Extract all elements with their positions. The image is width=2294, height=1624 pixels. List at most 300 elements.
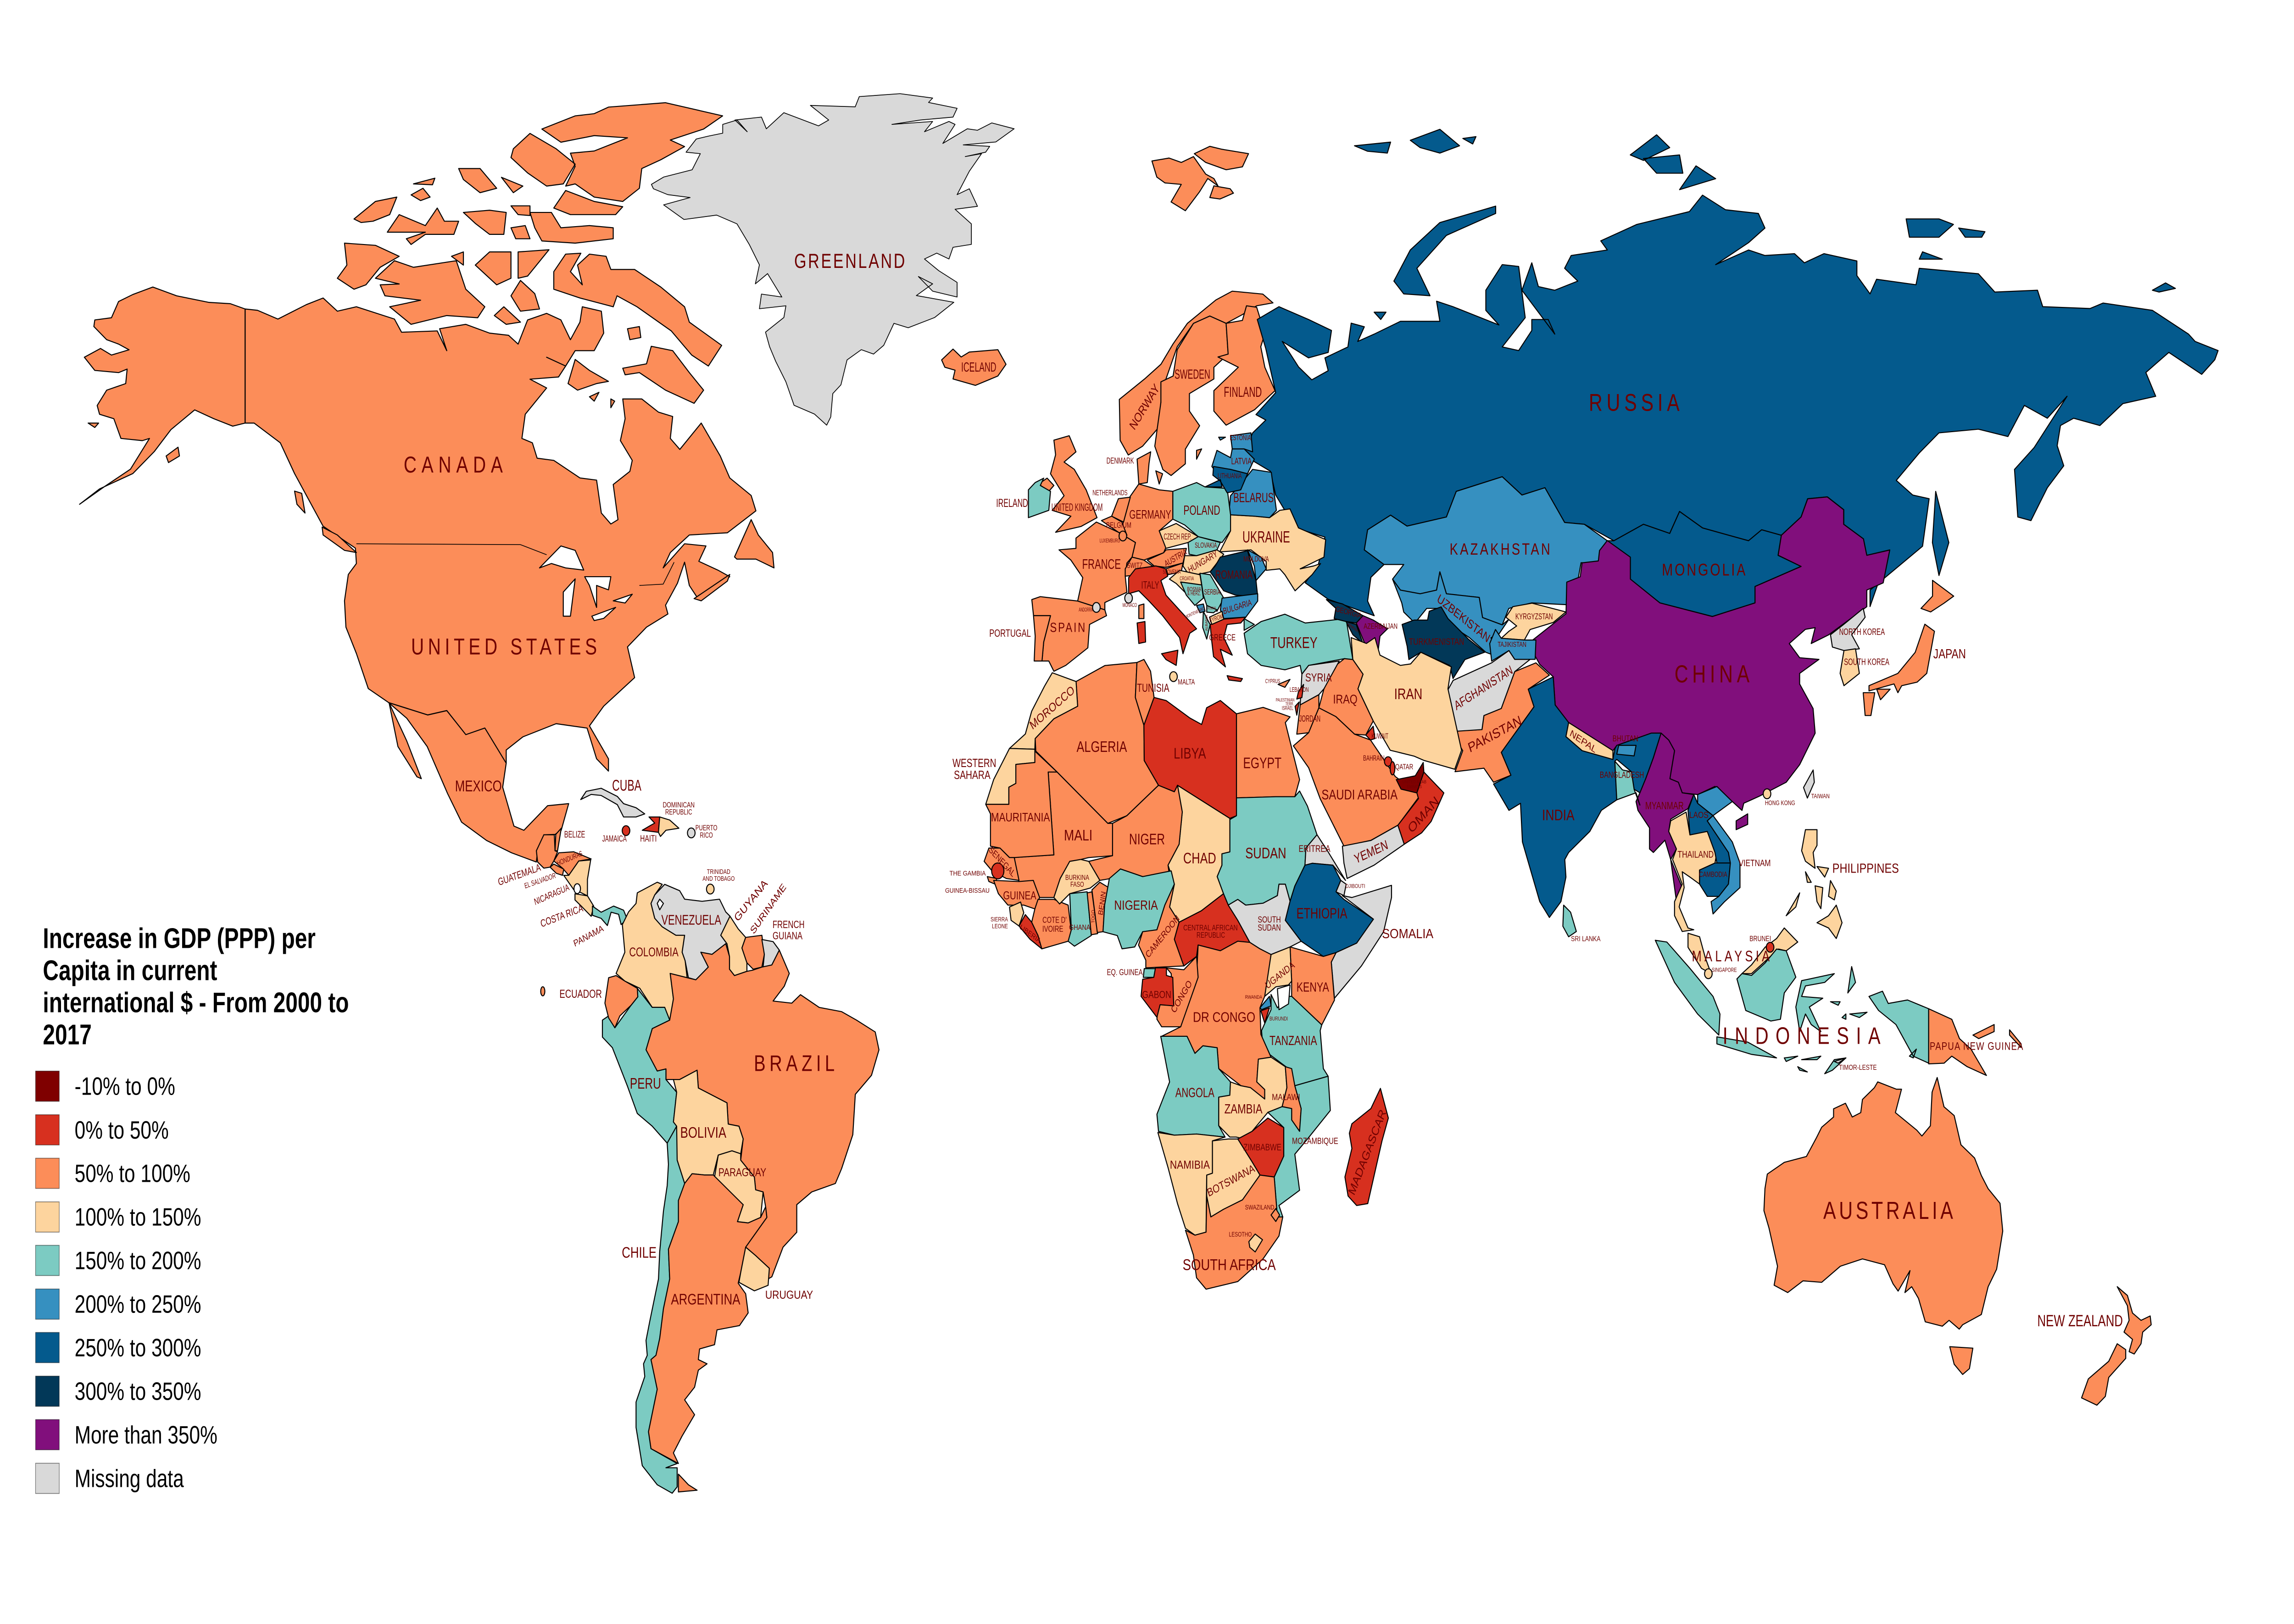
Belgium: [1102, 516, 1127, 535]
country name labels: SERBIA: [1204, 589, 1220, 597]
Indonesia: [1655, 940, 1929, 1073]
legend item: -10% to 0%: [35, 1071, 175, 1101]
country name labels: CYPRUS: [1265, 678, 1280, 684]
country name labels: THE GAMBIA: [950, 869, 986, 877]
Taiwan: [1804, 770, 1814, 798]
Yemen: [1342, 825, 1404, 879]
country name labels: HUNGARY: [1186, 548, 1219, 575]
country name labels: MALAWI: [1272, 1092, 1300, 1102]
Ethiopia: [1285, 863, 1374, 957]
country name labels: WESTERN: [952, 756, 996, 770]
country name labels: CHINA: [1675, 661, 1749, 688]
Singapore marker: [1704, 969, 1712, 979]
country name labels: BELGIUM: [1106, 521, 1131, 530]
legend item: 50% to 100%: [35, 1158, 190, 1189]
country name labels: OMAN: [1406, 794, 1441, 836]
Kosovo: [1207, 606, 1217, 613]
country name labels: CZECH REP.: [1164, 533, 1192, 542]
country name labels: FASO: [1070, 880, 1084, 888]
country name labels: MOLDOVA: [1243, 556, 1269, 563]
Finland: [1214, 306, 1275, 425]
country name labels: CAMBODIA: [1699, 871, 1727, 879]
country name labels: LEONE: [992, 923, 1008, 930]
country name labels: EQ. GUINEA: [1107, 968, 1143, 977]
Sierra Leone: [1009, 902, 1024, 926]
Oceania: [1764, 1078, 2151, 1405]
country name labels: FRENCH: [773, 919, 805, 931]
country name labels: BANGLADESH: [1600, 769, 1644, 780]
Iraq: [1319, 659, 1373, 735]
South and East Asia: [1448, 580, 2021, 1075]
country name labels: PANAMA: [572, 923, 605, 949]
South Sudan: [1228, 884, 1301, 955]
Peru: [602, 988, 677, 1143]
country name labels: & HERZ.: [1187, 590, 1201, 597]
Honduras: [554, 852, 591, 875]
country name labels: EL SALVADOR: [524, 872, 557, 890]
Germany: [1119, 484, 1173, 560]
Belarus: [1229, 469, 1276, 517]
Saudi Arabia: [1293, 708, 1419, 846]
Slovakia: [1188, 537, 1220, 556]
Hong Kong marker: [1763, 789, 1771, 799]
country name labels: KAZAKHSTAN: [1450, 540, 1550, 558]
Sweden: [1155, 316, 1228, 475]
Lithuania: [1205, 467, 1247, 493]
country name labels: BELARUS: [1233, 491, 1274, 505]
country name labels: NICARAGUA: [533, 881, 570, 907]
country name labels: SUDAN: [1258, 923, 1281, 933]
country name labels: NORWAY: [1127, 382, 1162, 433]
country name labels: LESOTHO: [1229, 1230, 1252, 1238]
Somalia: [1331, 885, 1392, 998]
country name labels: RICO: [700, 831, 713, 840]
country name labels: TUNISIA: [1137, 681, 1169, 694]
country name labels: DR CONGO: [1193, 1009, 1255, 1025]
legend item: 0% to 50%: 0% to 50%: [75, 1117, 169, 1144]
French Guiana: [762, 940, 780, 967]
Romania: [1210, 551, 1258, 597]
Panama: [592, 906, 627, 925]
country name labels: LIBYA: [1174, 745, 1206, 762]
Eritrea: [1305, 835, 1346, 880]
Moldova: [1247, 550, 1266, 581]
country name labels: ICELAND: [961, 360, 997, 375]
New Zealand: [2082, 1287, 2151, 1405]
country name labels: MOZAMBIQUE: [1292, 1136, 1338, 1146]
country name labels: BAHRAIN: [1363, 754, 1385, 762]
South America: [602, 882, 879, 1493]
country name labels: NETHERLANDS: [1092, 489, 1128, 497]
Iceland: [941, 349, 1006, 385]
Qatar marker: [1390, 762, 1395, 775]
country name labels: LUXEMBURG: [1100, 538, 1120, 544]
country name labels: INDIA: [1542, 807, 1575, 824]
Trinidad marker: [707, 884, 714, 894]
Philippines: [1786, 829, 1842, 939]
Namibia: [1158, 1133, 1225, 1235]
Thailand: [1669, 812, 1717, 931]
country name labels: FYROM: [1209, 612, 1224, 624]
Atlantic and Pacific Canadian islands: [88, 423, 774, 601]
Guinea-Bissau: [987, 877, 997, 884]
Brunei marker: [1766, 942, 1774, 952]
country name labels: CHAD: [1183, 850, 1216, 867]
Angola: [1157, 1036, 1231, 1137]
country name labels: ANDORRA: [1079, 607, 1093, 613]
Armenia: [1346, 622, 1363, 644]
country name labels: GERMANY: [1129, 508, 1171, 522]
country name labels: SOUTH KOREA: [1844, 656, 1890, 667]
Ghana: [1068, 892, 1091, 946]
country name labels: IVOIRE: [1042, 924, 1063, 934]
country name labels: SWITZ.: [1127, 562, 1144, 570]
Greenland: [651, 94, 1014, 425]
Bosnia and Herzegovina: [1180, 582, 1203, 606]
country name labels: KOSOVO: [1208, 606, 1216, 611]
legend title: international $ - From 2000 to: [43, 987, 349, 1018]
country name labels: DJIBOUTI: [1346, 883, 1365, 890]
country name labels: EGYPT: [1243, 755, 1281, 772]
France: [1059, 522, 1136, 610]
Tajikistan: [1490, 629, 1536, 661]
Jordan: [1297, 695, 1319, 734]
Afghanistan: [1448, 651, 1530, 731]
Malawi: [1282, 1067, 1301, 1131]
country name labels: PERU: [630, 1075, 661, 1092]
Tanzania: [1262, 995, 1328, 1086]
Argentina: [648, 1174, 767, 1492]
Slovenia: [1166, 563, 1183, 575]
country name labels: BOTSWANA: [1206, 1162, 1256, 1199]
country name labels: RUSSIA: [1589, 389, 1680, 417]
Switzerland: [1125, 557, 1153, 576]
Suriname: [742, 935, 764, 969]
country name labels: EMIRATES: [1407, 784, 1422, 789]
Chad: [1168, 785, 1230, 922]
country name labels: BHUTAN: [1613, 734, 1638, 744]
country name labels: RWANDA: [1245, 995, 1263, 1000]
country name labels: JORDAN: [1299, 714, 1320, 723]
country name labels: GUYANA: [732, 877, 769, 924]
country name labels: CANADA: [404, 451, 503, 478]
Sudan: [1217, 791, 1317, 905]
country name labels: MOROCCO: [1028, 683, 1077, 733]
Mozambique: [1268, 1076, 1331, 1217]
Ukraine: [1219, 509, 1325, 591]
country name labels: UNITED STATES: [411, 633, 597, 659]
country name labels: ETHIOPIA: [1297, 906, 1347, 922]
country name labels: BOSNIA: [1187, 586, 1201, 593]
country name labels: MYANMAR: [1645, 801, 1684, 812]
Senegal: [984, 848, 1019, 880]
Timor-Leste: [1834, 1058, 1846, 1063]
country name labels: TANZANIA: [1269, 1034, 1317, 1048]
country name labels: COSTA RICA: [540, 903, 584, 930]
Kyrgyzstan: [1501, 603, 1566, 640]
Vietnam: [1698, 786, 1740, 914]
country name labels: BENIN: [1097, 890, 1108, 916]
country name labels: KUWAIT: [1371, 733, 1388, 741]
Georgia: [1326, 600, 1363, 623]
Japan: [1863, 580, 1954, 716]
Guyana: [721, 916, 747, 976]
Bangladesh: [1615, 761, 1640, 805]
Uruguay: [739, 1247, 769, 1291]
country name labels: TRINIDAD: [707, 868, 730, 875]
country name labels: TAIWAN: [1811, 792, 1830, 800]
Gabon: [1141, 968, 1174, 1017]
Austria: [1147, 548, 1186, 567]
Bolivia: [674, 1070, 743, 1184]
country name labels: PORTUGAL: [989, 628, 1031, 640]
country name labels: NEPAL: [1568, 728, 1598, 755]
Russia and northern Asia: [1243, 129, 2218, 656]
country name labels: ZIMBABWE: [1243, 1142, 1281, 1152]
country name labels: SURINAME: [749, 882, 788, 936]
Lake Maracaibo: [657, 899, 663, 910]
country name labels: BURKINA: [1065, 873, 1089, 882]
legend item: 200% to 250%: 200% to 250%: [75, 1291, 201, 1318]
small country markers: [541, 531, 1774, 996]
country name labels: BOLIVIA: [680, 1124, 726, 1141]
Democratic Republic of the Congo: [1162, 941, 1271, 1099]
Rwanda: [1260, 996, 1271, 1010]
El Salvador: [550, 864, 564, 875]
Kazakhstan: [1364, 477, 1607, 625]
Uzbekistan: [1392, 572, 1509, 656]
country name labels: UNITED KINGDOM: [1052, 502, 1103, 513]
country name labels: LATVIA: [1231, 456, 1252, 466]
country name labels: IRAN: [1394, 686, 1422, 703]
Pakistan: [1451, 663, 1549, 782]
United Kingdom: [1039, 436, 1097, 532]
Greenland, Iceland and Nordic countries: [651, 94, 1275, 475]
Libya: [1144, 697, 1236, 818]
country name labels: MONTENEGRO: [1185, 606, 1205, 620]
Colombia: [616, 882, 687, 1020]
Lesotho: [1249, 1234, 1263, 1252]
Israel: [1295, 702, 1299, 715]
Belize: [555, 828, 561, 851]
legend: [35, 923, 355, 1493]
Morocco: [1009, 673, 1078, 749]
country name labels: IRELAND: [996, 497, 1028, 510]
Oman: [1398, 772, 1444, 844]
Canada borders: [245, 309, 674, 585]
country name labels: SLOVAKIA: [1195, 542, 1217, 550]
country name labels: CROATIA: [1180, 576, 1194, 582]
Denmark: [1137, 452, 1163, 484]
legend item: Missing data: Missing data: [75, 1465, 184, 1493]
country name labels: TAJIKISTAN: [1498, 640, 1526, 648]
Czech Republic: [1159, 523, 1198, 548]
country name labels: QATAR: [1395, 763, 1413, 771]
country name labels: MALI: [1064, 827, 1092, 844]
country name labels: NORTH KOREA: [1839, 626, 1885, 637]
country name labels: UGANDA: [1264, 959, 1297, 991]
Western Sahara: [986, 748, 1035, 804]
Puerto Rico marker: [687, 828, 695, 838]
Swaziland: [1271, 1208, 1280, 1222]
country name labels: MADAGASCAR: [1346, 1107, 1389, 1197]
country name labels: SAUDI ARABIA: [1321, 787, 1398, 802]
country name labels: UNITED ARAB: [1403, 779, 1426, 784]
Hungary: [1183, 550, 1224, 576]
Paraguay: [714, 1151, 763, 1223]
country name labels: DOMINICAN: [663, 801, 695, 809]
Bahrain marker: [1385, 757, 1392, 766]
country name labels: SINGAPORE: [1712, 967, 1737, 973]
country name labels: SLOVENIA: [1163, 568, 1181, 575]
Gambia marker: [991, 863, 1004, 879]
country name labels: GUATEMALA: [497, 862, 542, 888]
country name labels: SYRIA: [1305, 671, 1332, 684]
Estonia: [1219, 433, 1253, 452]
country name labels: NAMIBIA: [1170, 1158, 1210, 1171]
Malaysian Borneo: [1742, 928, 1798, 973]
country name labels: MALTA: [1178, 678, 1195, 686]
Myanmar: [1636, 733, 1694, 901]
country name labels: GUIANA: [773, 930, 802, 942]
Kenya: [1290, 947, 1336, 1025]
country name labels: GUINEA: [1003, 889, 1036, 902]
Tunisia: [1136, 659, 1154, 725]
country name labels: ARGENTINA: [671, 1291, 741, 1308]
country name labels: GREENLAND: [794, 250, 905, 273]
Africa and Arabian Peninsula: [984, 659, 1444, 1289]
country name labels: PAPUA NEW GUINEA: [1930, 1040, 2023, 1052]
Congo: [1157, 957, 1198, 1027]
Guatemala: [536, 835, 557, 868]
Burkina Faso: [1054, 859, 1100, 904]
North Korea: [1831, 608, 1865, 651]
Algeria: [1035, 662, 1158, 823]
country name labels: YEMEN: [1353, 838, 1390, 867]
Haiti: [642, 817, 660, 832]
Iran: [1351, 638, 1462, 769]
country name labels: TOGO: [1091, 910, 1096, 923]
country name labels: MEXICO: [455, 778, 502, 795]
country name labels: JAMAICA: [602, 834, 627, 844]
country name labels: NEW ZEALAND: [2038, 1312, 2123, 1330]
Russia: [1243, 195, 2218, 616]
country name labels: JAPAN: [1933, 647, 1966, 662]
Cyprus: [1278, 679, 1290, 687]
country name labels: MAURITANIA: [991, 811, 1050, 824]
country name labels: AUSTRALIA: [1823, 1197, 1953, 1224]
country name labels: REPUBLIC: [665, 808, 692, 817]
Monaco marker: [1125, 593, 1132, 603]
Mongolia: [1607, 512, 1801, 617]
country name labels: DENMARK: [1107, 456, 1134, 466]
legend title: Increase in GDP (PPP) per: [43, 923, 316, 954]
South Africa: [1186, 1175, 1283, 1289]
country name labels: TURKEY: [1270, 634, 1317, 651]
legend item: 150% to 200%: 150% to 200%: [75, 1247, 201, 1275]
Chile: [636, 1126, 686, 1493]
country name labels: FINLAND: [1224, 384, 1262, 400]
country name labels: THAILAND: [1677, 850, 1714, 860]
Nepal: [1566, 723, 1613, 759]
Mauritania: [986, 751, 1057, 857]
country name labels: LITHUANIA: [1218, 472, 1242, 480]
Central African Republic: [1175, 894, 1250, 966]
country name labels: GREECE: [1209, 632, 1236, 643]
legend item: 0% to 50%: [35, 1115, 169, 1145]
Bulgaria: [1220, 594, 1258, 618]
country name labels: BELIZE: [564, 829, 585, 840]
country name labels: SOUTH AFRICA: [1183, 1256, 1276, 1274]
Azerbaijan: [1356, 616, 1387, 649]
country name labels: SOMALIA: [1382, 927, 1434, 941]
Greece: [1210, 617, 1246, 682]
Cote d'Ivoire: [1032, 900, 1071, 949]
India: [1493, 677, 1661, 918]
Egypt: [1236, 707, 1300, 798]
country name labels: ITALY: [1141, 580, 1159, 591]
country name labels: SENEGAL: [987, 844, 1017, 879]
country name labels: SAHARA: [954, 768, 991, 781]
legend item: 250% to 300%: 250% to 300%: [75, 1334, 201, 1362]
Ireland: [1029, 478, 1051, 517]
country name labels: BURUNDI: [1269, 1016, 1288, 1022]
country name labels: COLOMBIA: [629, 945, 679, 959]
Netherlands: [1112, 497, 1130, 522]
country name labels: BRAZIL: [754, 1051, 835, 1076]
Great Lakes: [540, 546, 632, 621]
Turkey: [1244, 614, 1353, 674]
Alaska: [79, 287, 245, 504]
country name labels: IRAQ: [1333, 692, 1358, 706]
Australia: [1764, 1078, 2003, 1374]
Syria: [1300, 661, 1339, 705]
Cuba: [581, 788, 645, 817]
legend item: 50% to 100%: 50% to 100%: [75, 1160, 190, 1188]
country name labels: ALGERIA: [1076, 739, 1127, 756]
Cambodia: [1699, 863, 1731, 896]
country name labels: SPAIN: [1050, 621, 1085, 635]
country name labels: ARMENIA: [1347, 622, 1359, 633]
Guinea: [994, 880, 1040, 909]
Papua New Guinea: [1929, 1009, 2021, 1075]
country name labels: ESTONIA: [1230, 434, 1251, 442]
Poland: [1173, 483, 1231, 543]
Gotland: [1197, 449, 1202, 459]
Latvia: [1212, 449, 1254, 474]
Cameroon: [1139, 884, 1184, 968]
Uganda: [1265, 947, 1292, 996]
Montenegro: [1197, 604, 1205, 613]
Turkmenistan: [1402, 607, 1485, 679]
country name labels: GEORGIA: [1335, 605, 1362, 620]
country name labels: HONDURAS: [556, 850, 583, 868]
country name labels: HAITI: [640, 833, 657, 844]
country name labels: CHILE: [622, 1245, 657, 1262]
Liberia: [1019, 915, 1042, 949]
country name labels: PALESTINIAN: [1276, 697, 1294, 702]
country name labels: GUINEA-BISSAU: [945, 887, 990, 895]
Galapagos marker: [541, 987, 545, 996]
country name labels: AFGHANISTAN: [1453, 663, 1514, 713]
Costa Rica: [575, 894, 594, 916]
Lake Victoria: [1277, 985, 1290, 1010]
country name labels: KENYA: [1297, 980, 1330, 995]
country name labels: LEBANON: [1290, 685, 1308, 693]
country name labels: NIGERIA: [1114, 898, 1158, 913]
North Macedonia: [1209, 611, 1224, 624]
Sri Lanka: [1563, 905, 1576, 937]
